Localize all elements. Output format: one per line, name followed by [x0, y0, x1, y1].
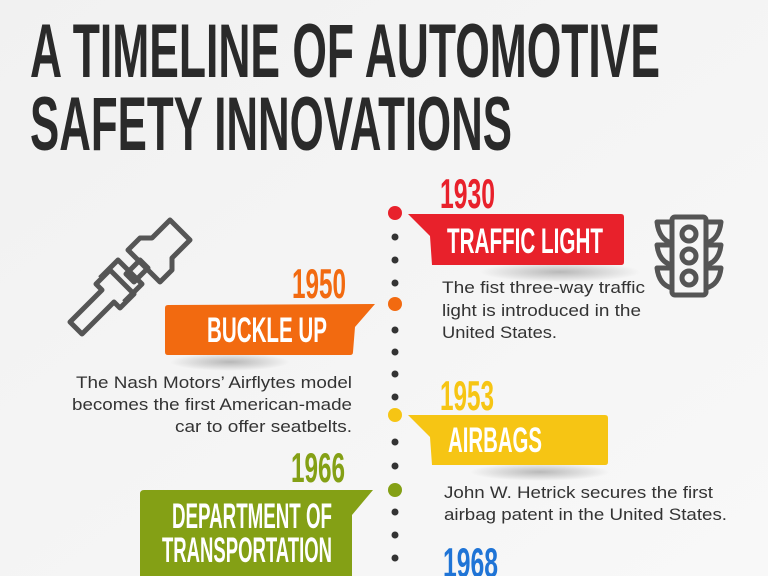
- text: buckle up: The Nash Motors’ Airflytes model: [76, 373, 352, 392]
- year 1930: 1930: [440, 170, 495, 217]
- timeline dots: [388, 206, 402, 562]
- banner: traffic light: TRAFFIC LIGHT: [447, 222, 603, 261]
- text: traffic light: United States.: [442, 323, 557, 342]
- banner: department of transportation: [140, 490, 373, 576]
- text: traffic light: The fist three-way traffic: [442, 278, 646, 297]
- text: airbags: John W. Hetrick secures the first: [444, 483, 713, 502]
- text: traffic light: light is introduced in the: [442, 301, 641, 320]
- banner: airbags: [408, 415, 610, 481]
- banner: buckle up: [165, 304, 375, 371]
- banner: airbags: AIRBAGS: [448, 421, 542, 460]
- year 1966: 1966: [291, 444, 345, 491]
- year 1953: 1953: [440, 372, 494, 419]
- banner: buckle up: BUCKLE UP: [207, 311, 327, 350]
- text: buckle up: car to offer seatbelts.: [175, 417, 352, 436]
- banner: department of transportation: TRANSPORTATION: [162, 531, 332, 570]
- text: buckle up: becomes the first American-made: [72, 395, 352, 414]
- icon: seatbelt: [70, 220, 190, 334]
- year 1950: 1950: [292, 260, 346, 307]
- title: [30, 9, 660, 167]
- text: airbags: airbag patent in the United States.: [444, 505, 727, 524]
- banner: traffic light: [408, 214, 640, 282]
- banner: department of transportation: DEPARTMENT OF: [172, 497, 332, 536]
- icon: traffic light: [657, 217, 721, 295]
